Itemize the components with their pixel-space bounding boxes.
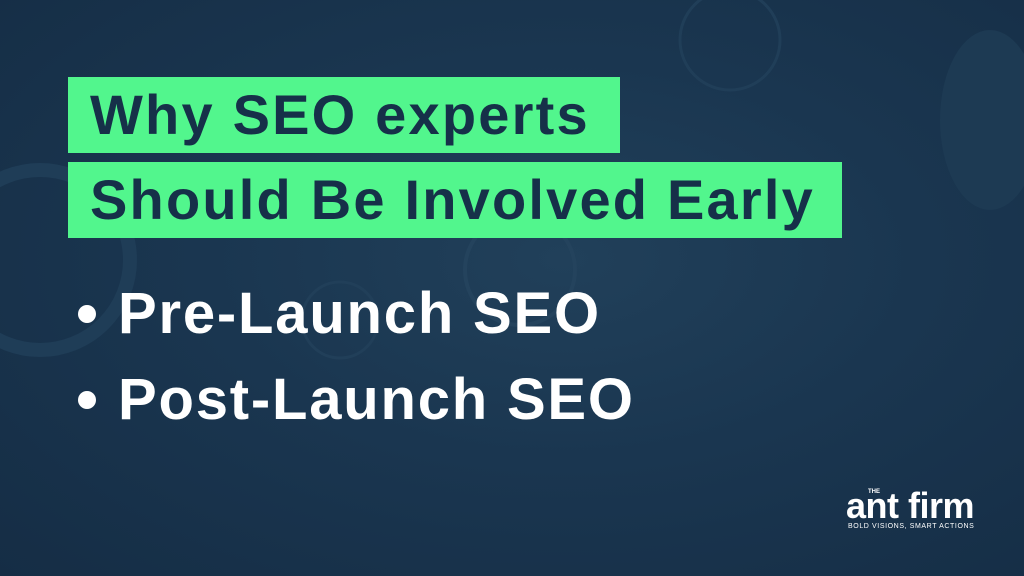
logo: ant firm: [846, 485, 974, 526]
logo: BOLD VISIONS, SMART ACTIONS: [848, 523, 974, 530]
logo: THE: [868, 489, 880, 495]
title line 1: Why SEO experts: [90, 83, 590, 146]
title line 2: Should Be Involved Early: [90, 168, 815, 231]
bullet: pre-launch: Pre-Launch SEO: [118, 281, 601, 346]
title: [68, 77, 842, 238]
bullet: post-launch: Post-Launch SEO: [118, 367, 635, 432]
